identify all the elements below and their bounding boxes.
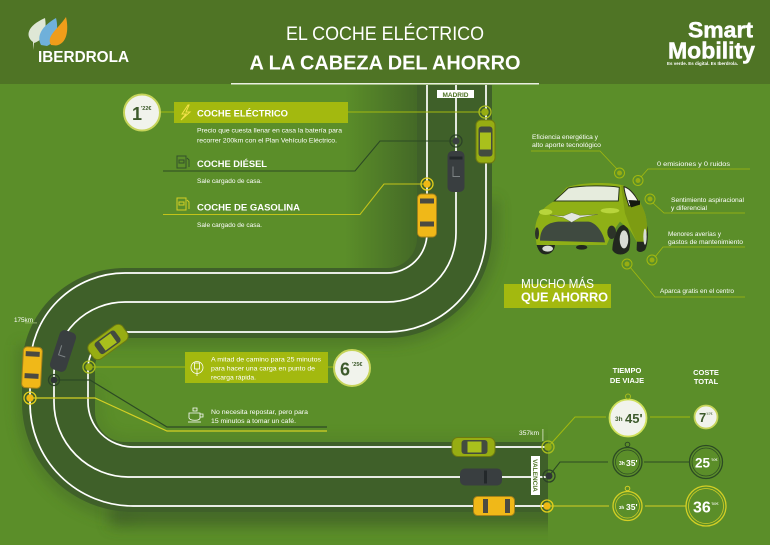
cost: eléctrico 7: 7 [699,410,706,425]
node: dark left [48,374,60,386]
callout: sentimiento: y diferencial [671,206,707,212]
node: green top [479,106,491,118]
price badge 6,25: 6 [340,360,350,380]
cost: diésel 25: '50€ [711,458,718,462]
car: yellow top [418,194,436,237]
cost: diésel 25 [690,446,722,478]
node: dark bottom [543,470,555,482]
panel: café: No necesita repostar, pero para [211,409,308,416]
cost: eléctrico 7 [694,406,718,428]
node: green bottom [542,441,554,453]
heading: mucho más que ahorro: MUCHO MÁS [521,276,594,291]
callout: eficiencia: alto aporte tecnológico [532,143,602,149]
distance label 357km: 357km [519,430,539,437]
callout: sentimiento: Sentimiento aspiracional [671,198,744,204]
road [22,85,620,526]
price badge 6,25: '25€ [352,362,362,368]
heading: mucho más que ahorro: QUE AHORRO [521,290,608,304]
cost: gasolina 36 [686,486,726,526]
heading: coste total [693,368,719,386]
icon: fuel pump yellow [177,198,189,210]
panel: coche eléctrico [174,102,348,144]
logo: Iberdrola [29,17,129,66]
stopwatch: diésel 3h 35 [613,442,642,476]
callout: averías: Menores averías y [668,232,721,238]
stopwatch: eléctrico 3h 45: 45' [625,411,643,426]
icon: fuel pump dark [177,156,189,168]
node: green left [83,361,95,373]
heading: tiempo de viaje: TIEMPO [613,366,642,375]
panel: coche eléctrico: recorrer 200km con el Plan Vehículo Eléctrico. [197,138,337,144]
title [231,22,539,84]
Valencia label [531,456,540,495]
panel: coche eléctrico: Precio que cuesta llenar en casa la batería para [197,128,343,134]
car: dark left [49,329,77,373]
car: dark bottom [460,468,502,486]
stopwatch: diésel 3h 35: 3h [619,461,625,467]
car: yellow left [21,347,43,388]
title: A LA CABEZA DEL AHORRO [250,52,521,74]
stopwatch: eléctrico 3h 45 [610,394,646,436]
header band [0,0,770,84]
stopwatch: eléctrico 3h 45: 3h [615,416,623,423]
price badge 1,22: '22€ [141,106,151,112]
car: green bottom [452,438,495,456]
cost: eléctrico 7: '47€ [706,412,713,416]
Valencia label: VALENCIA [531,459,538,492]
panel: carga rápida: A mitad de camino para 25 minutos [211,356,322,364]
heading: tiempo de viaje: DE VIAJE [610,376,644,385]
stopwatch: gasolina 3h 35 [613,486,642,520]
node: dark top [450,135,462,147]
logo: Smart Mobility [667,18,755,67]
logo: Iberdrola: IBERDROLA [38,49,129,66]
panel: coche diésel [177,156,267,185]
heading: coste total: TOTAL [694,377,719,386]
car: green top [476,120,495,163]
heading: mucho más que ahorro [504,276,611,308]
stopwatch: gasolina 3h 35: 35' [626,502,637,512]
panel: café: 15 minutos a tomar un café. [211,418,296,425]
callout: averías: gastos de mantenimiento [668,240,744,246]
car: dark top [448,151,464,192]
logo: Smart Mobility: Smart [688,18,754,42]
cost: gasolina 36: 36 [693,500,711,516]
price badge 1,22: 1 [132,104,142,124]
node: yellow top [421,178,433,190]
price badge 1,22 [124,94,160,130]
callout: averías [647,232,745,265]
distance label 357km [519,429,543,441]
panel: coche diésel: COCHE DIÉSEL [197,159,267,170]
connector: petrol car [163,184,427,214]
icon: lightning bolt [181,105,190,120]
car: front view [535,183,648,254]
panel: coche eléctrico: COCHE ELÉCTRICO [197,108,288,120]
callout: aparca [622,259,745,297]
panel: coche diésel: Sale cargado de casa. [197,178,262,185]
panel: coche de gasolina: Sale cargado de casa. [197,222,262,229]
title: EL COCHE ELÉCTRICO [286,22,484,45]
panel: carga rápida [185,352,328,383]
connector: electric car [160,111,485,113]
callout: aparca: Aparca gratis en el centro [660,289,735,295]
connector: arrival green [548,417,690,447]
icon: plug [191,362,203,376]
price badge 6,25 [334,350,370,386]
panel: café [188,408,308,425]
cost: diésel 25: 25 [695,456,711,470]
cost: gasolina 36: '50€ [711,501,719,506]
connector: midpoint dark [54,380,327,427]
stopwatch: gasolina 3h 35: 3h [619,505,625,510]
logo: Smart Mobility: Es verde. Es digital. Es Iberdrola. [667,61,738,67]
stopwatch: diésel 3h 35: 35' [626,458,637,468]
logo: Smart Mobility: Mobility [668,38,755,64]
Madrid label [437,90,474,99]
callout: emisiones [633,162,750,186]
distance label 175km: 175km [14,317,33,324]
car: green left [85,322,131,362]
Madrid label: MADRID [442,92,469,99]
callout: emisiones: 0 emisiones y 0 ruidos [657,162,730,168]
node: yellow left [24,392,36,404]
connector: midpoint green [89,366,335,368]
connector: arrival yellow [547,505,686,507]
panel: carga rápida: recarga rápida. [211,374,256,382]
callout: sentimiento [645,194,745,213]
heading: coste total: COSTE [693,368,719,377]
panel: carga rápida: para hacer una carga en punto de [211,366,315,372]
connector: midpoint yellow [30,398,327,431]
panel: coche de gasolina: COCHE DE GASOLINA [197,202,300,214]
connector: arrival dark [549,462,689,476]
heading: tiempo de viaje [610,366,644,385]
icon: coffee cup [188,408,203,422]
callout: eficiencia: Eficiencia energética y [532,135,598,141]
node: yellow bottom [541,500,553,512]
callout: eficiencia [531,135,624,178]
car: yellow bottom [474,496,514,516]
panel: coche de gasolina [177,198,300,229]
connector: diesel car [163,141,456,171]
